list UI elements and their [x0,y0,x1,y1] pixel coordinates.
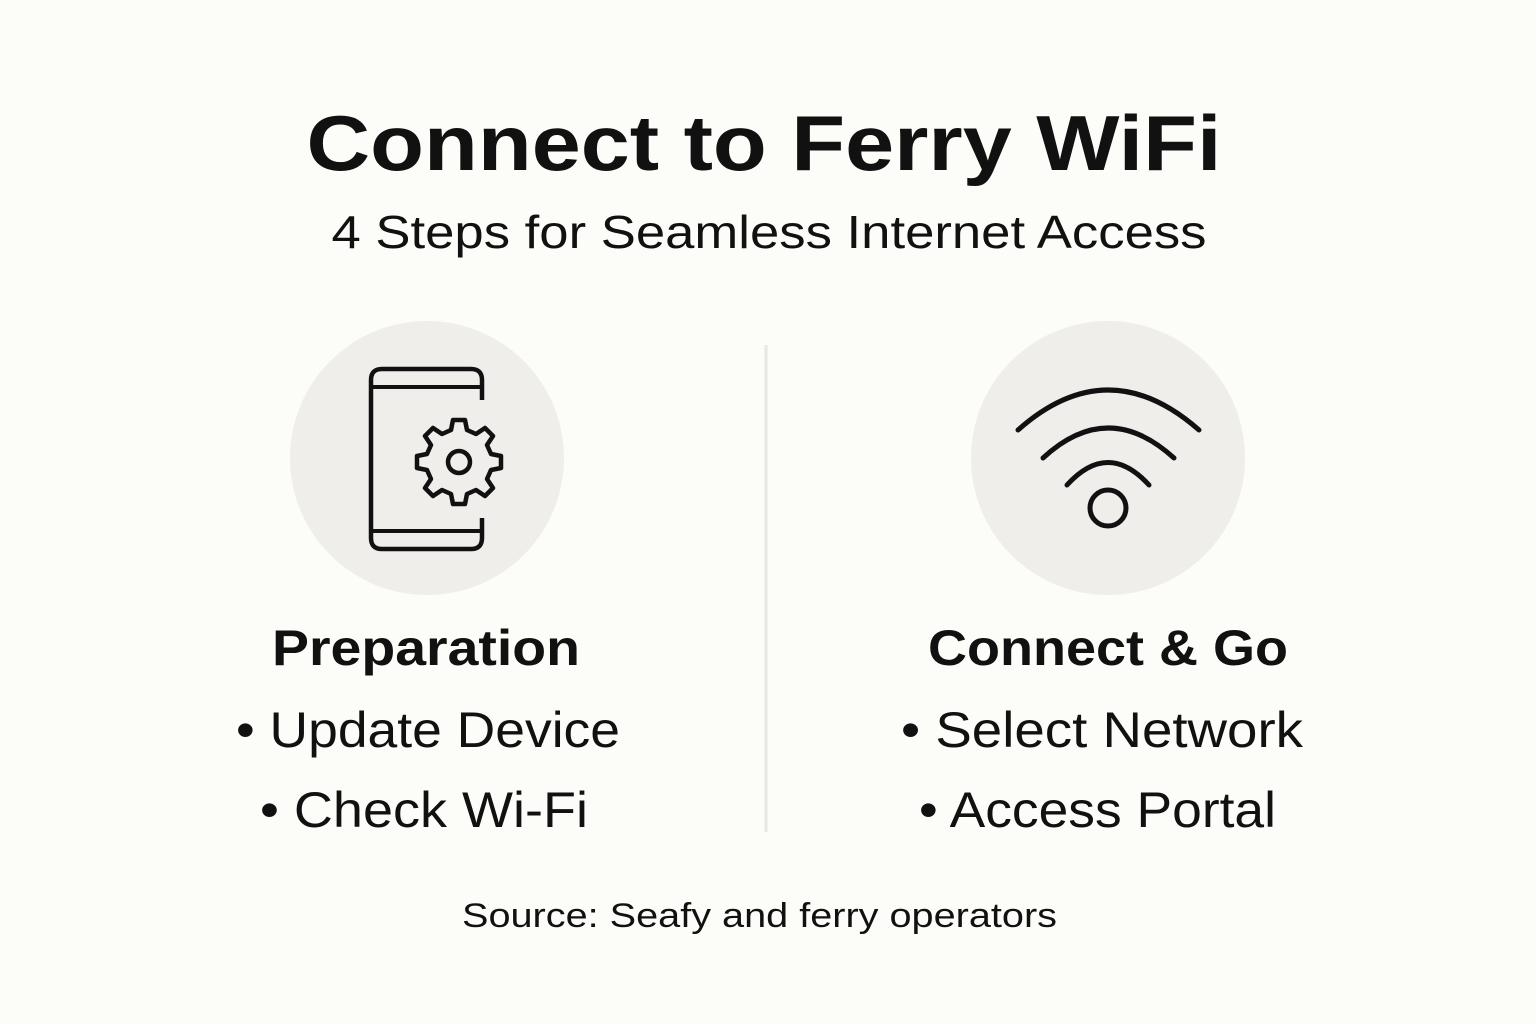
panel: preparation [236,321,620,838]
subtitle: 4 Steps for Seamless Internet Access [332,206,1206,258]
heading: connect & go: Connect & Go [928,620,1288,676]
bullets: preparation: • Update Device [236,702,620,758]
bullets: connect & go: • Select Network [901,702,1304,758]
panel: connect & go [901,321,1304,838]
bullets: connect & go [901,702,1304,838]
bullets: preparation [236,702,620,838]
bullets: connect & go: • Access Portal [919,782,1276,838]
source: Source: Seafy and ferry operators [462,897,1057,935]
icon: wifi [971,321,1245,595]
heading: preparation: Preparation [272,620,580,676]
icon: phone with gear [290,321,564,595]
bullets: preparation: • Check Wi-Fi [260,782,588,838]
title: Connect to Ferry WiFi [306,99,1222,187]
